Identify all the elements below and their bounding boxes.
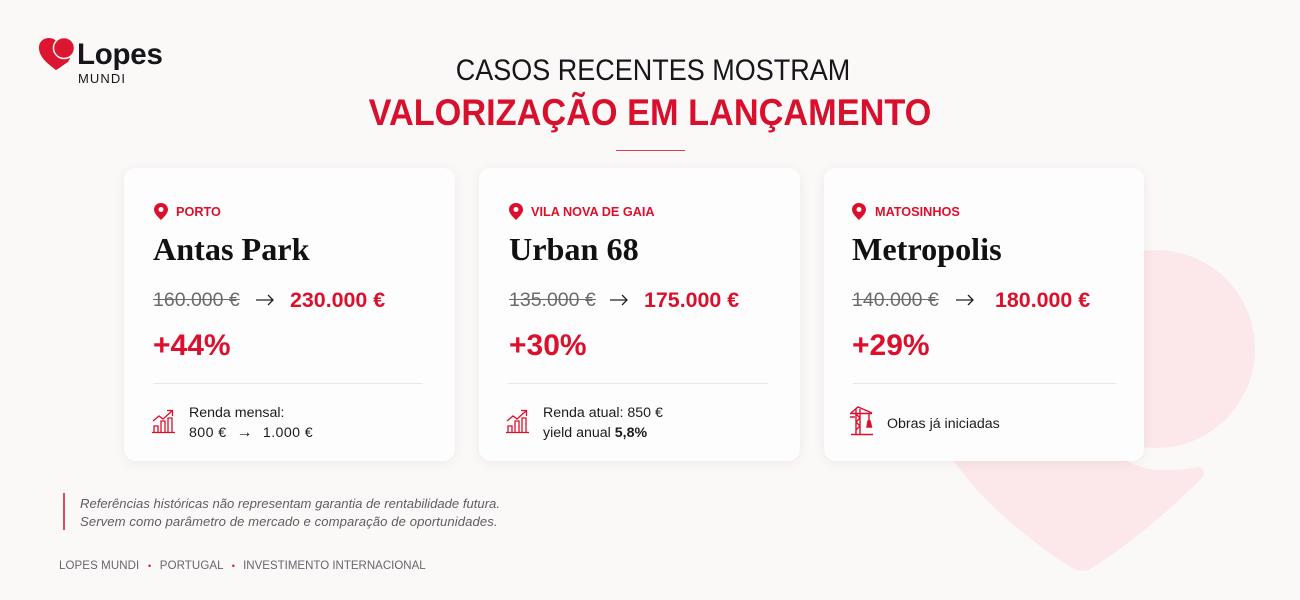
disclaimer text: Servem como parâmetro de mercado e comparação de oportunidades.	[80, 514, 498, 529]
logo subtitle: MUNDI	[78, 71, 126, 86]
title line 2: VALORIZAÇÃO EM LANÇAMENTO	[369, 92, 931, 133]
new price: 175.000 €	[644, 288, 739, 312]
rent text: yield anual 5,8%	[543, 425, 647, 441]
project name: Antas Park	[153, 231, 309, 267]
logo	[39, 38, 163, 86]
project name: Urban 68	[509, 231, 639, 267]
percent: +44%	[153, 329, 231, 362]
location: PORTO	[176, 205, 221, 219]
panel: Antas Park	[124, 168, 455, 461]
icon: logo heart	[39, 38, 74, 70]
percent: +29%	[852, 329, 930, 362]
disclaimer text	[80, 496, 500, 529]
icon: pin	[852, 203, 866, 220]
footer: LOPES MUNDI • PORTUGAL • INVESTIMENTO INTERNACIONAL	[59, 560, 426, 572]
icon: crane	[850, 406, 873, 436]
disclaimer bar	[63, 493, 64, 530]
title line 1: CASOS RECENTES MOSTRAM	[456, 54, 850, 87]
arrow	[256, 294, 274, 306]
icon: pin	[509, 203, 523, 220]
arrow	[610, 294, 628, 306]
rent text: Renda mensal:	[189, 405, 284, 421]
new price: 180.000 €	[995, 288, 1090, 312]
rent text	[543, 405, 663, 441]
location: MATOSINHOS	[875, 205, 960, 219]
new price: 230.000 €	[290, 288, 385, 312]
old price: 160.000 €	[153, 289, 240, 311]
icon: chart	[506, 410, 529, 434]
old price: 140.000 €	[852, 289, 939, 311]
logo wordmark: Lopes	[77, 38, 163, 71]
status text: Obras já iniciadas	[887, 416, 1000, 432]
panel: Urban 68	[479, 168, 800, 461]
icon: pin	[154, 203, 168, 220]
location: VILA NOVA DE GAIA	[531, 205, 655, 219]
panel: Metropolis	[824, 168, 1144, 461]
title divider	[616, 150, 685, 151]
old price: 135.000 €	[509, 289, 596, 311]
rent text: 800 € → 1.000 €	[189, 424, 313, 441]
disclaimer	[63, 493, 500, 530]
icon: chart	[152, 410, 175, 434]
percent: +30%	[509, 329, 587, 362]
arrow	[956, 294, 974, 306]
rent text	[189, 405, 313, 441]
disclaimer text: Referências históricas não representam garantia de rentabilidade futura.	[80, 496, 500, 511]
project name: Metropolis	[852, 231, 1002, 267]
rent text: Renda atual: 850 €	[543, 405, 663, 421]
